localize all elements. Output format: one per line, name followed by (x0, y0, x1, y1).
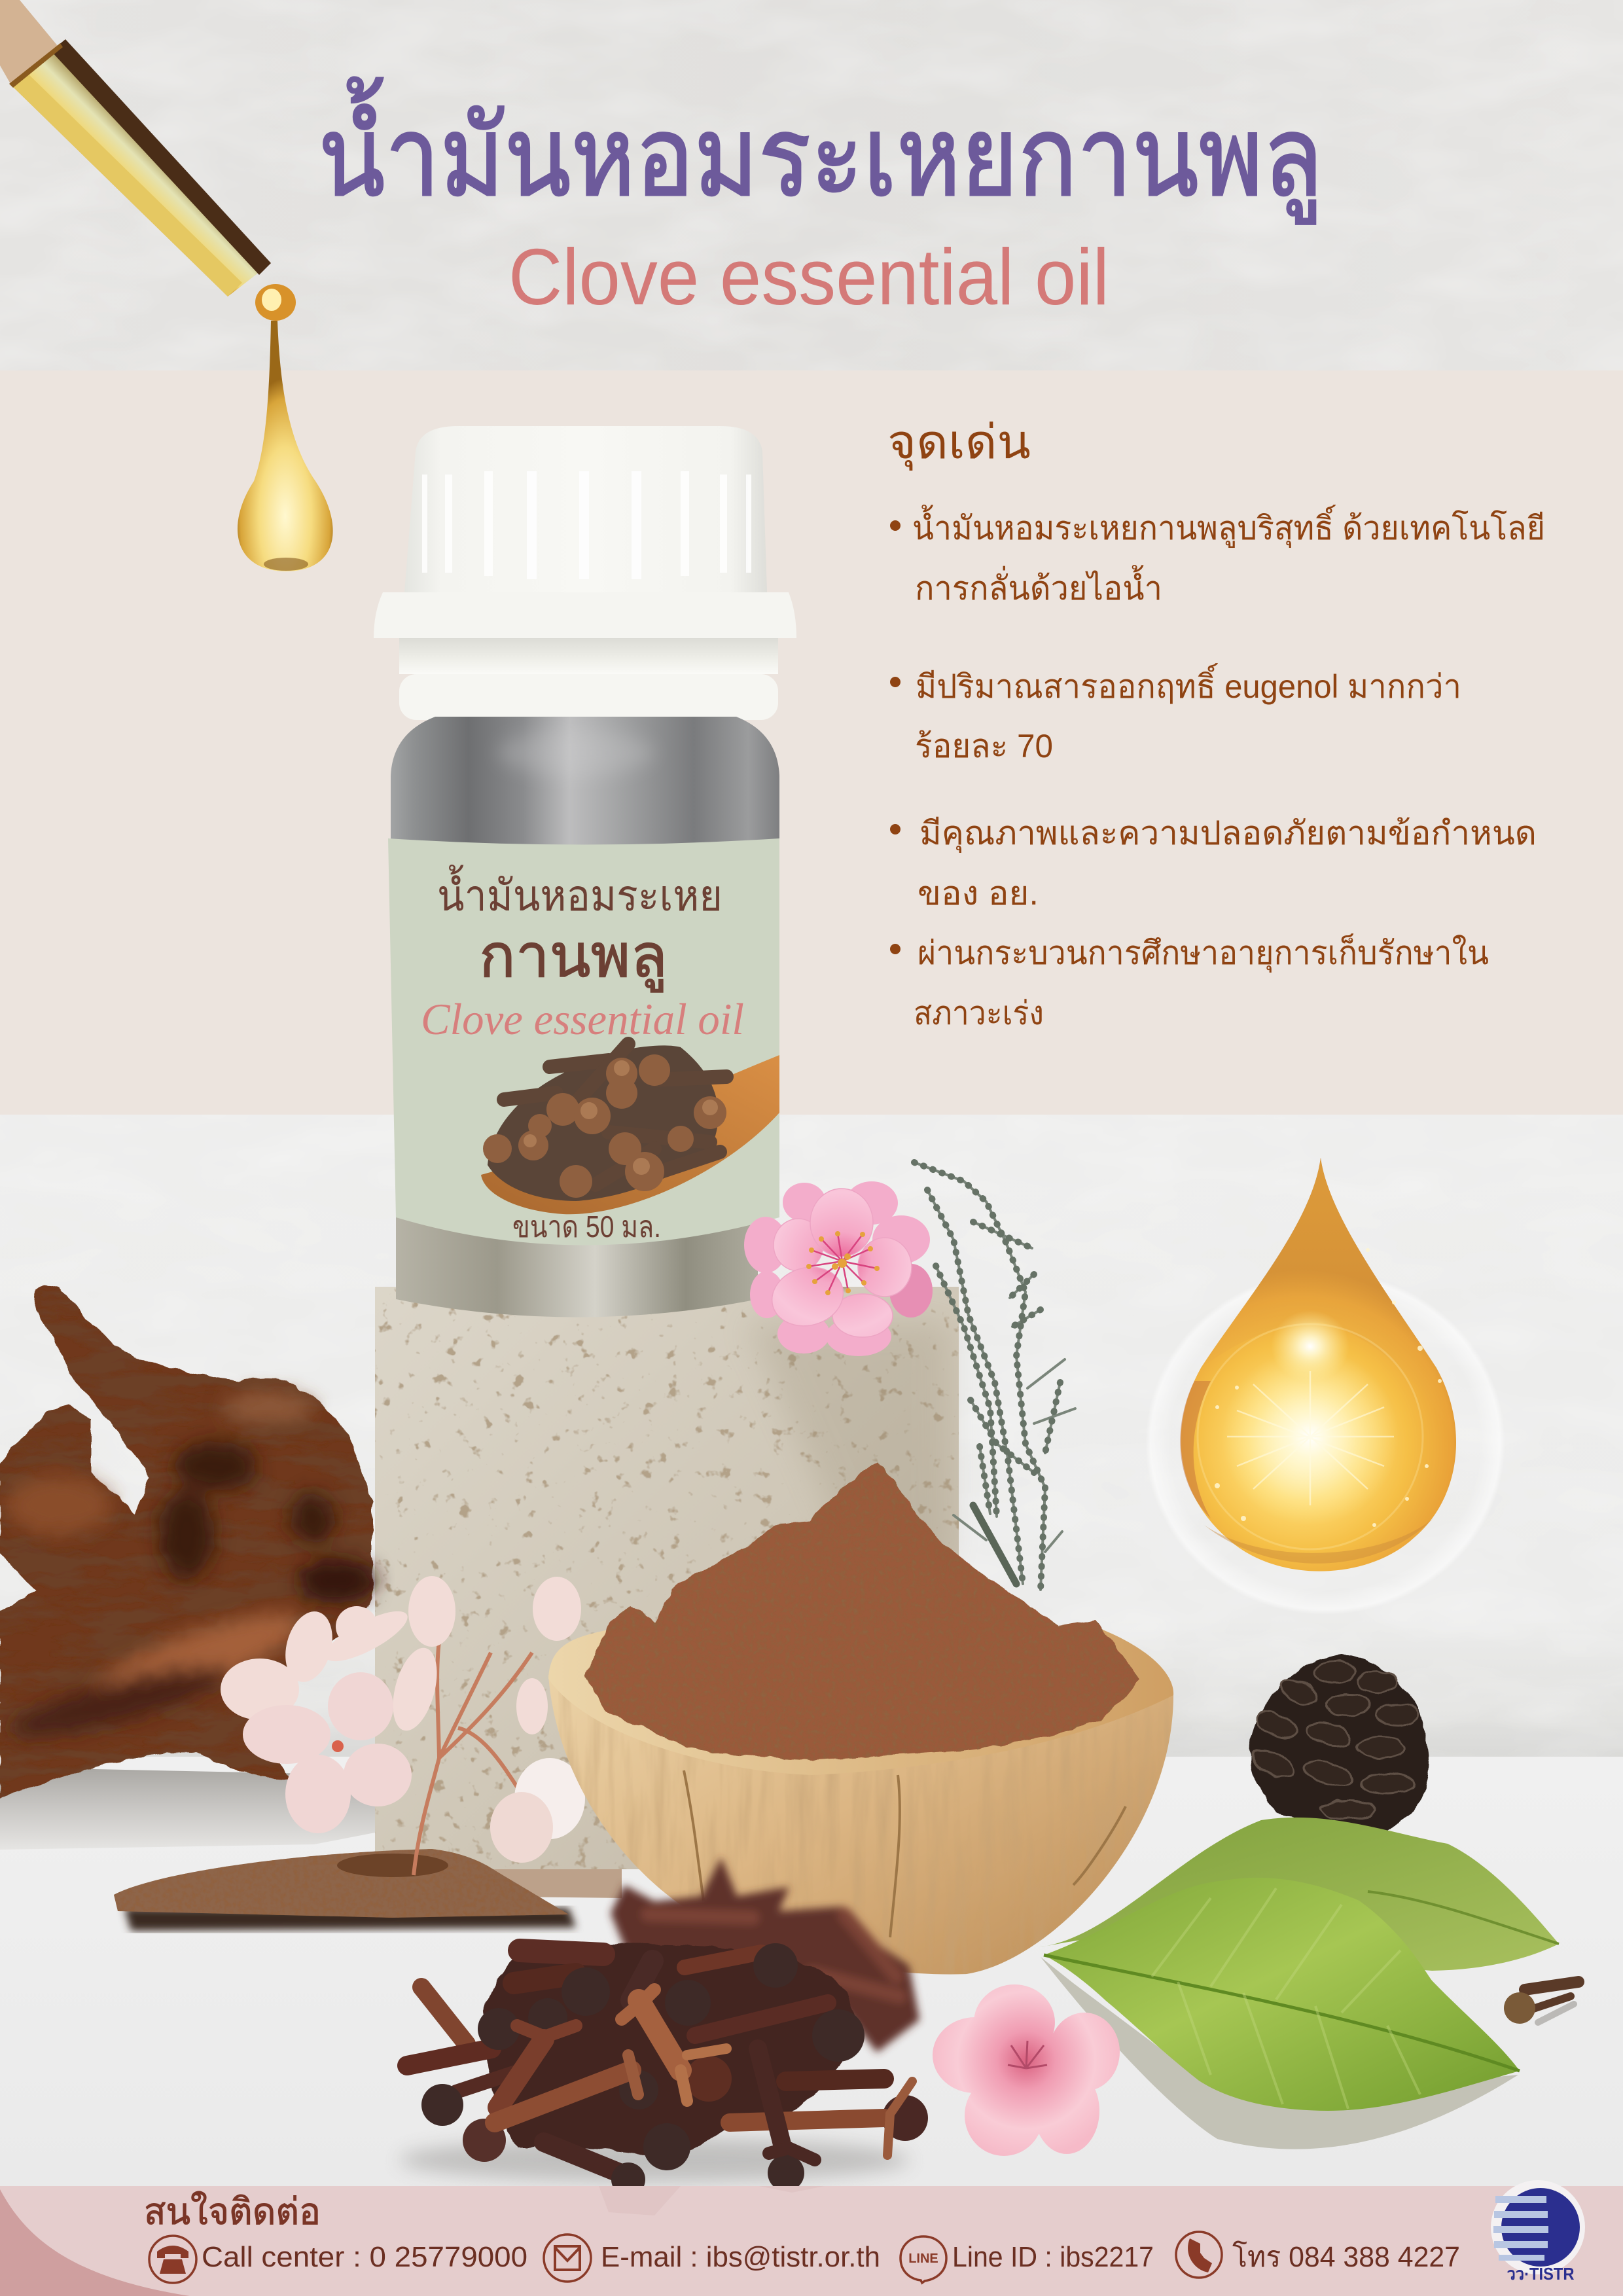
footer contact band (0, 2180, 1623, 2296)
icon: telephone (149, 2236, 196, 2283)
bullet 3 (890, 815, 1537, 912)
email address: E-mail : ibs@tistr.or.th (601, 2241, 880, 2273)
faded clove reflection (599, 2186, 825, 2215)
leaf veins (1152, 1888, 1420, 2109)
header background band (0, 0, 1623, 370)
label title: น้ำมันหอมระเหย (437, 865, 722, 920)
icon: golden oil drop (1145, 1158, 1505, 1615)
cloves base mass (481, 1944, 856, 2157)
icon: single clove (1504, 1982, 1578, 2024)
icon: pink cherry blossom by bottle (744, 1181, 933, 1356)
bullet 2: ร้อยละ 70 (915, 728, 1053, 764)
bullet 4: ผ่านกระบวนการศึกษาอายุการเก็บรักษาใน (918, 933, 1489, 973)
icon: aluminium bottle with label (374, 426, 796, 1317)
logo: TISTR: วว·TISTR (1507, 2264, 1575, 2284)
icon: LINE: LINE (908, 2251, 938, 2266)
blossom stamens (809, 1234, 877, 1293)
panel: product highlights text (887, 416, 1545, 1031)
telephone number: โทร 084 388 4227 (1232, 2240, 1460, 2273)
sprig of dried herb (914, 1162, 1075, 1590)
icon: green leaves (1039, 1818, 1559, 2111)
footer heading: contact us: สนใจติดต่อ (144, 2191, 321, 2232)
back stems (407, 1950, 884, 2175)
bullet 2 (890, 662, 1461, 764)
bullet 4: สภาวะเร่ง (914, 995, 1044, 1031)
label English name: Clove essential oil (421, 994, 744, 1044)
icon: wooden bowl (548, 1618, 1173, 1974)
bottle cap (374, 426, 796, 720)
clove powder (585, 1463, 1140, 1760)
title: Thai product name: น้ำมันหอมระเหยกานพลู (318, 77, 1323, 224)
stone pedestal (375, 1287, 959, 1898)
bullet 3: มีคุณภาพและความปลอดภัยตามข้อกำหนด (919, 815, 1537, 853)
pine cone (1248, 1655, 1430, 1837)
icon: LINE (901, 2236, 946, 2283)
bottle label (388, 838, 779, 1245)
clove pile shadow (399, 2138, 910, 2182)
bullet 1 (890, 504, 1545, 607)
icon: glass dropper with falling oil drop (0, 0, 333, 571)
call center number: Call center : 0 25779000 (202, 2241, 527, 2273)
heading: highlights: จุดเด่น (887, 416, 1031, 471)
icon: pile of dried cloves (399, 1857, 928, 2197)
bullet 1: การกลั่นด้วยไอน้ำ (915, 565, 1162, 607)
floor (0, 1757, 1623, 2189)
bark slab with shadow (114, 1849, 576, 1931)
spoon of cloves (483, 1044, 726, 1201)
leaf shadow (1041, 1957, 1518, 2149)
subtitle: Clove essential oil: Clove essential oil (508, 232, 1109, 321)
logo: TISTR (1491, 2180, 1585, 2284)
icon: mail (544, 2234, 591, 2282)
back leaf (1039, 1818, 1559, 1971)
bullet 3: ของ อย. (918, 875, 1039, 912)
line id: Line ID : ibs2217 (952, 2241, 1154, 2273)
spoon (481, 1055, 779, 1214)
bullet 2: มีปริมาณสารออกฤทธิ์ eugenol มากกว่า (916, 662, 1461, 705)
icon: white dried flowers (221, 1576, 585, 1875)
rear blurred cloves (611, 1857, 919, 2053)
label size text: ขนาด 50 มล. (512, 1210, 661, 1244)
driftwood shadow (0, 1767, 375, 1850)
bullet 4 (890, 933, 1489, 1031)
lower scene background wall (0, 1115, 1623, 1759)
driftwood (0, 1285, 376, 1799)
front leaf (1044, 1878, 1520, 2111)
bullet 1: น้ำมันหอมระเหยกานพลูบริสุทธิ์ ด้วยเทคโนโลยี (912, 504, 1545, 548)
clove buds (421, 1943, 928, 2197)
icon: phone handset (1176, 2232, 1222, 2278)
footer corner accent (0, 2189, 190, 2296)
front clove stems (495, 1990, 912, 2160)
bottle metal body (391, 717, 779, 851)
icon: watercolor pink flower (933, 1984, 1120, 2156)
label name: กานพลู (479, 923, 668, 992)
highlights panel background (0, 370, 1623, 1115)
driftwood hollows and highlights (5, 1393, 376, 1749)
